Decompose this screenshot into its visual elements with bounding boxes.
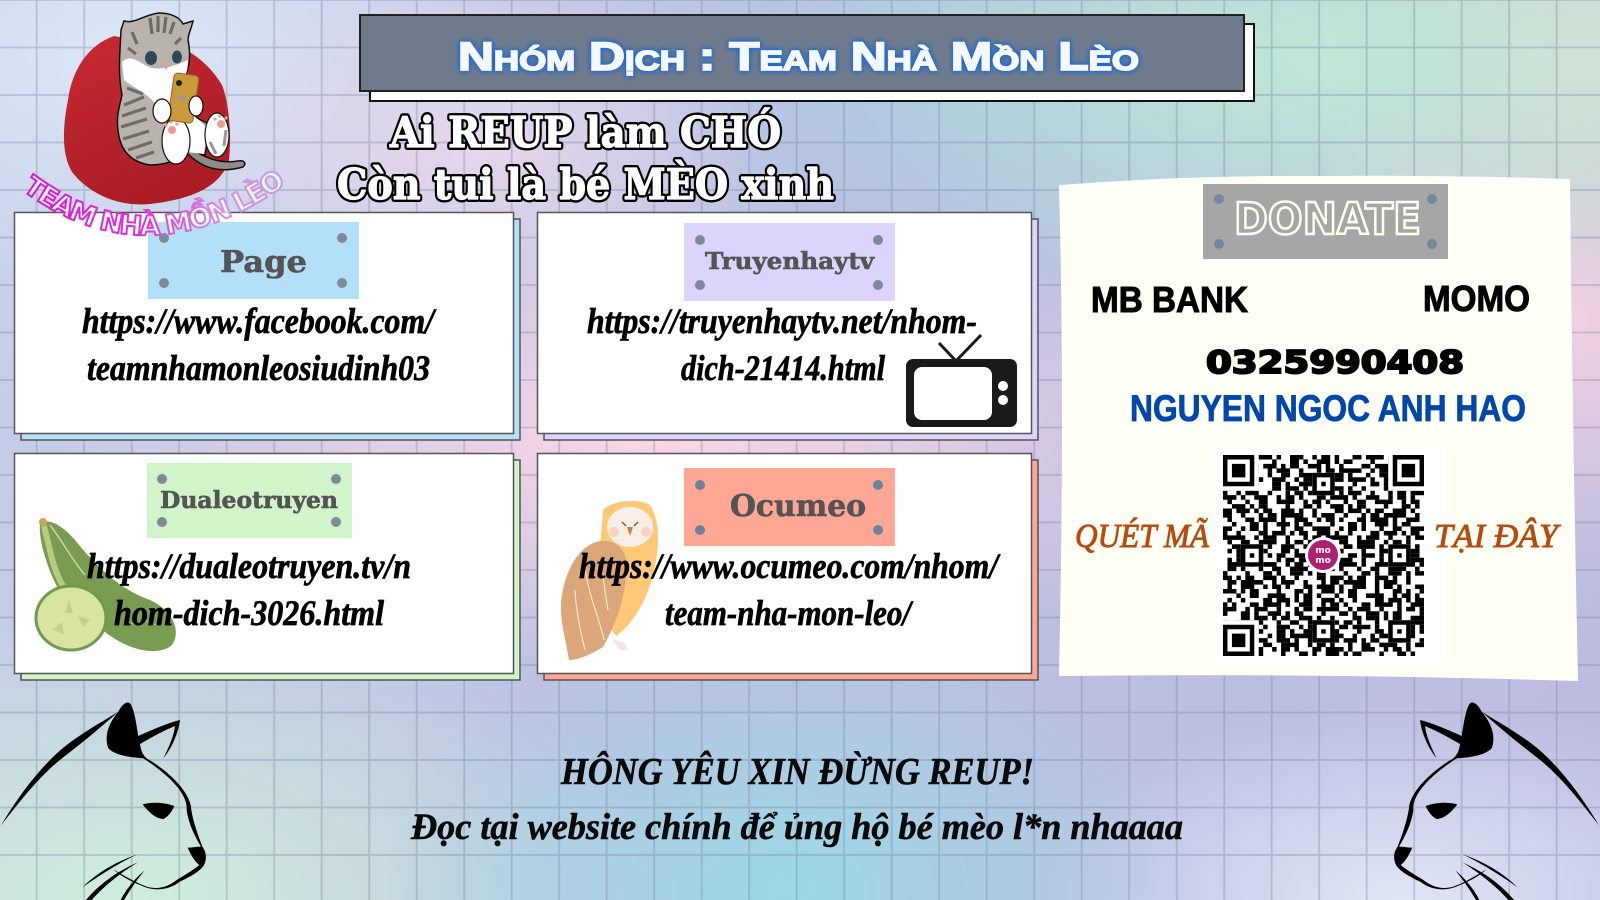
panel: donate [1060,177,1577,680]
title banner [360,15,1254,101]
bank labels: MOMO [1423,278,1530,319]
warning heading [337,107,834,209]
panel: Truyenhaytv card [538,212,1038,440]
tag: Truyenhaytv: Truyenhaytv [705,248,875,275]
QR code [1214,449,1446,663]
tag: DONATE [1203,184,1448,259]
warning heading: Còn tui là bé MÈO xinh [337,159,834,209]
link text: facebook: teamnhamonleosiudinh03 [87,348,430,388]
link text: dualeotruyen [87,546,411,633]
illustration: left cat outline [1,703,206,900]
link text: truyenhaytv [587,301,977,388]
illustration: right cat outline [1394,703,1599,900]
panel: Ocumeo card [538,454,1038,680]
link text: truyenhaytv: dich-21414.html [681,348,885,388]
curved logo text: TEAM NHÀ MỒN LÈO [26,170,283,236]
bottom message: HÔNG YÊU XIN ĐỪNG REUP! [560,750,1034,793]
link text: truyenhaytv: https://truyenhaytv.net/nhom- [587,301,977,341]
bottom message [410,750,1183,848]
tag: Page: Page [220,245,307,280]
link text: ocumeo: https://www.ocumeo.com/nhom/ [579,546,1001,586]
tag: Page [148,222,359,299]
icon: television [906,335,1017,427]
link text: facebook [82,301,437,388]
account name: NGUYEN NGOC ANH HAO [1130,388,1526,429]
bank labels [1091,278,1530,320]
tag: DONATE: DONATE [1234,194,1421,245]
tag: Ocumeo: Ocumeo [730,489,866,524]
scan captions: QUÉT MÃ [1075,518,1209,555]
icon: owl [561,501,658,660]
phone number: 0325990408 [1206,345,1464,381]
panel: Page card [14,212,520,440]
QR code: mo [1315,546,1331,556]
icon: cucumber [36,518,176,651]
link text: dualeotruyen: hom-dich-3026.html [114,593,384,633]
scan captions [1075,518,1561,555]
bank labels: MB BANK [1091,279,1248,320]
tag: Dualeotruyen: Dualeotruyen [160,487,338,514]
scan captions: TẠI ĐÂY [1434,518,1561,555]
link text: ocumeo: team-nha-mon-leo/ [665,593,914,633]
bottom message: Đọc tại website chính để ủng hộ bé mèo l*n nhaaaa [410,807,1183,848]
link text: ocumeo [579,546,1001,633]
title banner: Nhóm Dịch : Team Nhà Mồn Lèo [458,35,1139,79]
warning heading: Ai REUP làm CHÓ [389,107,781,157]
tag: Ocumeo [684,468,895,546]
panel: Dualeotruyen card [14,454,520,680]
link text: dualeotruyen: https://dualeotruyen.tv/n [87,546,411,586]
QR code: mo [1315,556,1331,566]
warning heading: Ai REUP làm CHÓ [389,107,781,157]
tag: Dualeotruyen [147,463,352,538]
illustration: cat on red bean bag [64,13,245,204]
link text: facebook: https://www.facebook.com/ [82,301,437,341]
warning heading: Còn tui là bé MÈO xinh [337,159,834,209]
tag: Truyenhaytv [684,223,895,301]
